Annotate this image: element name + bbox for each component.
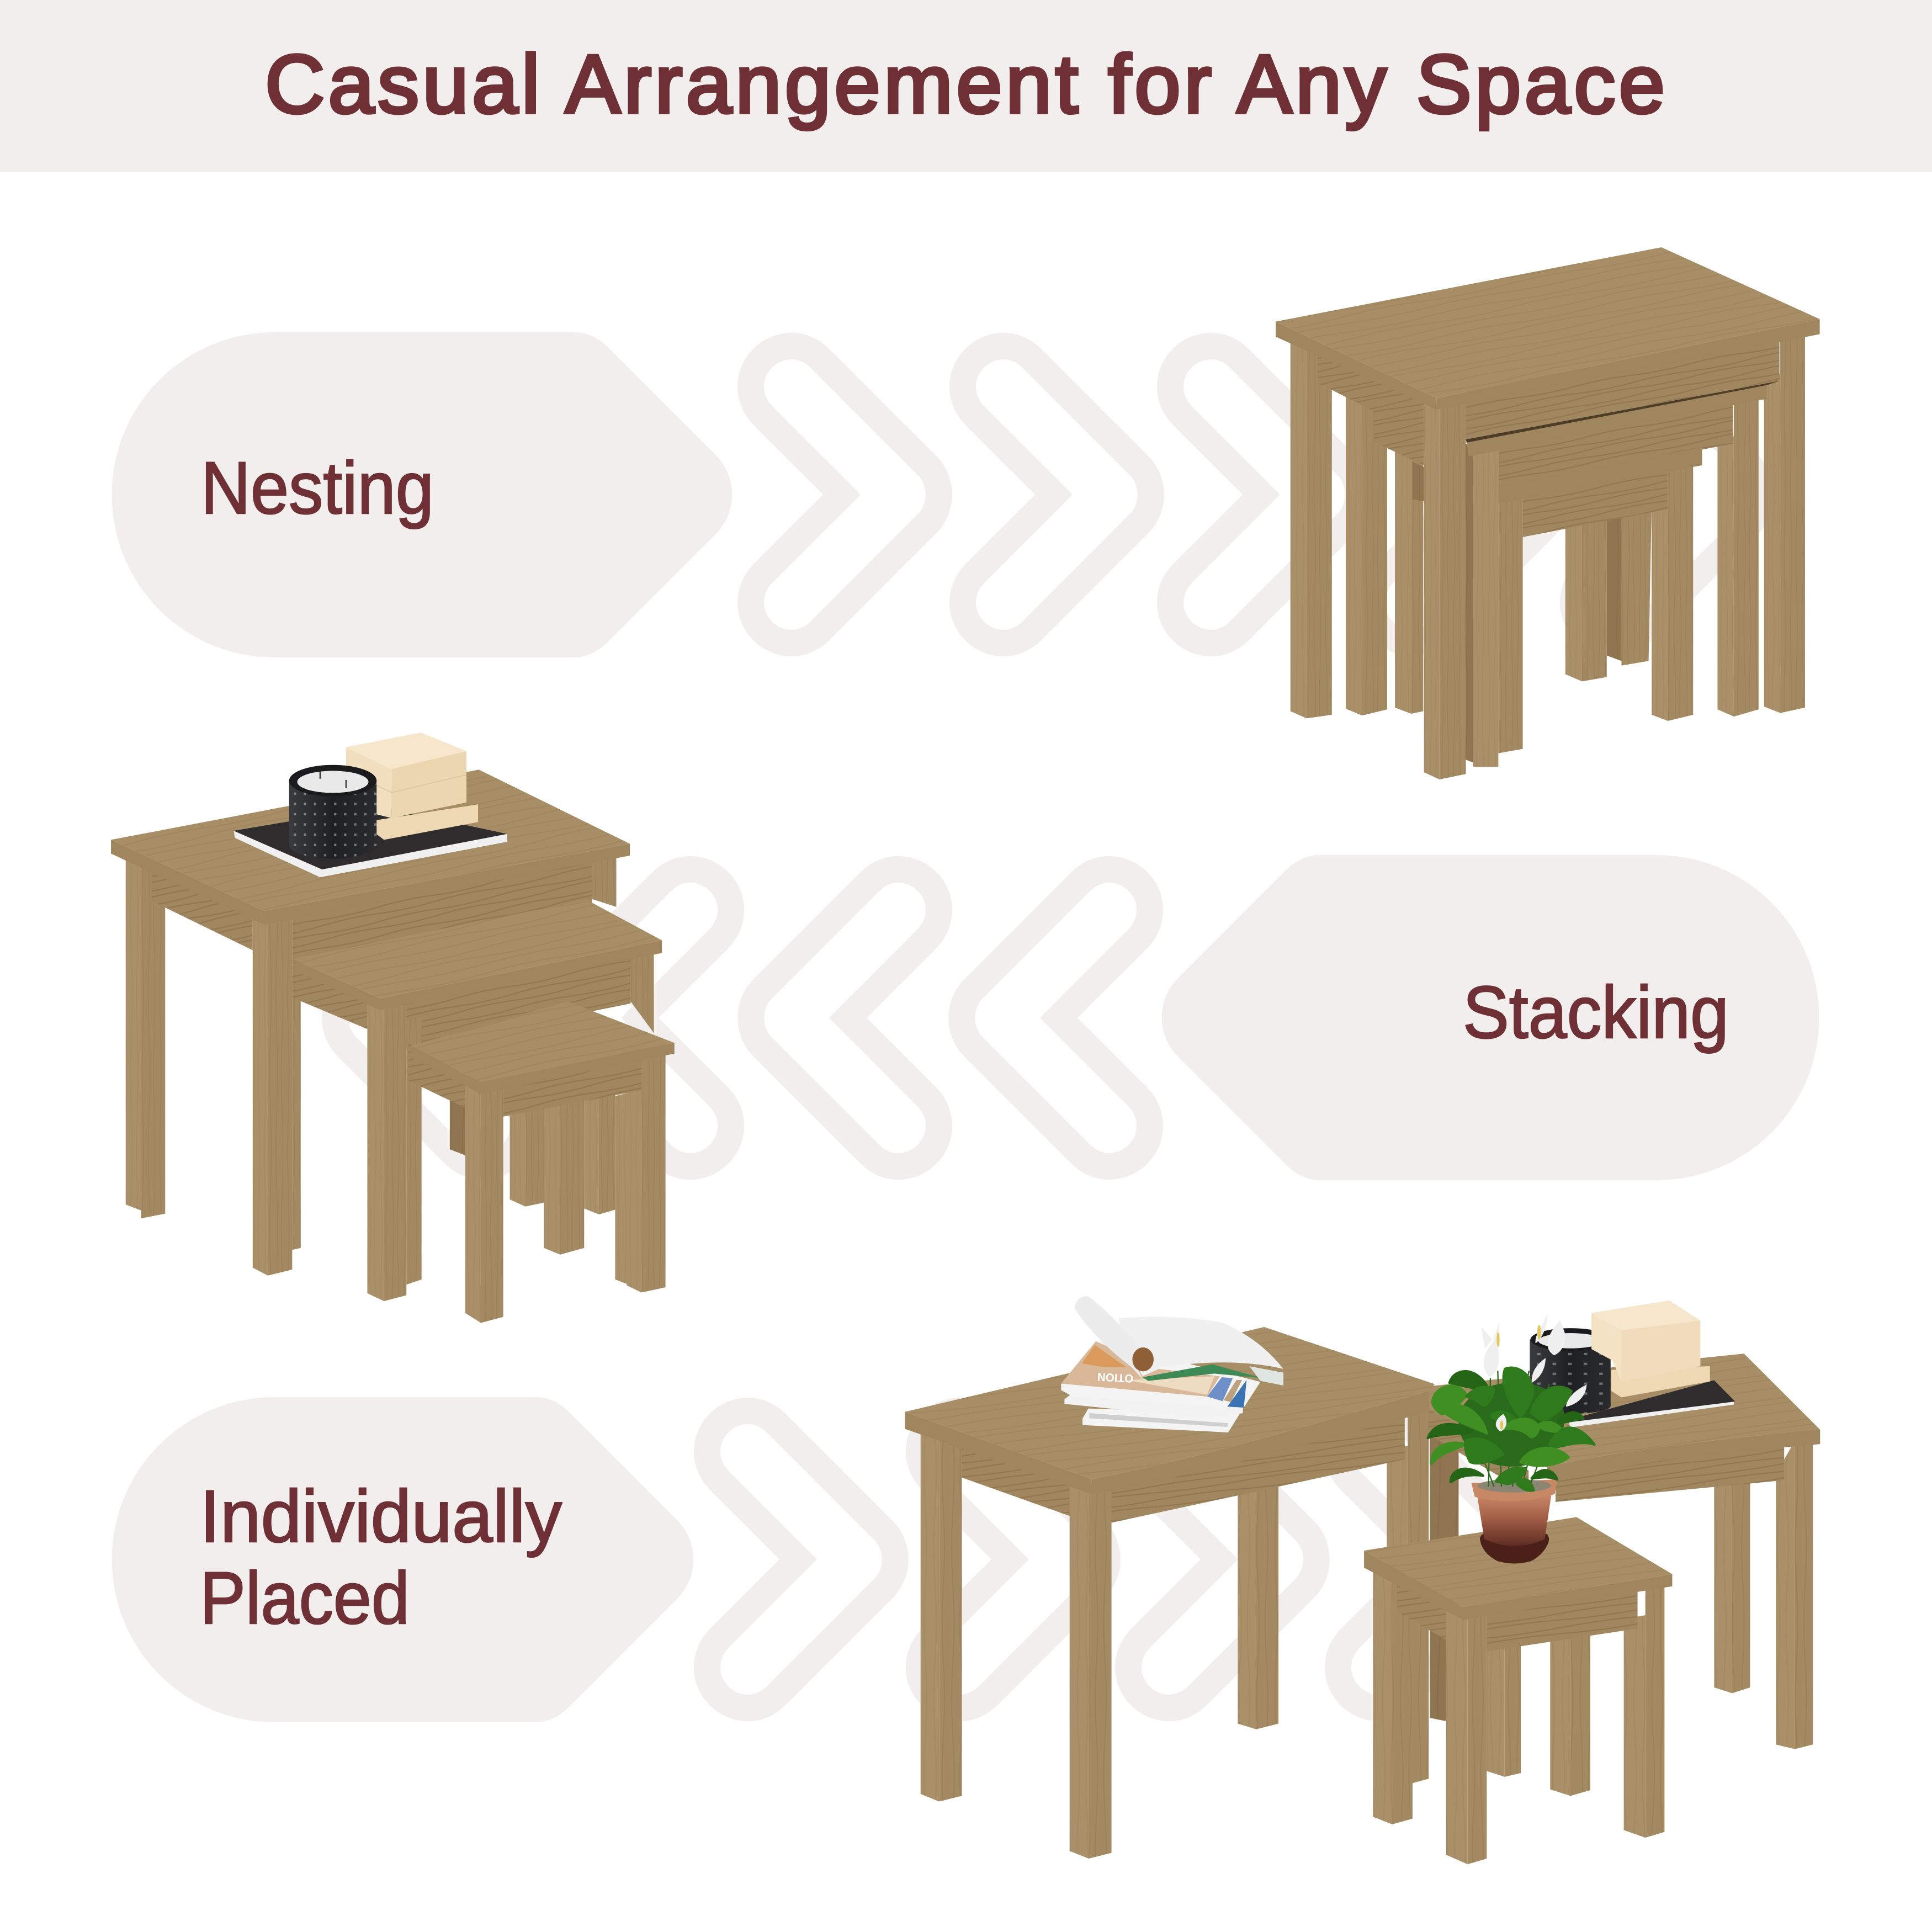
leaf mass behind	[1458, 1382, 1564, 1467]
row 3 arrows: chevrons pointing right	[707, 1411, 1526, 1708]
row 1 arrows: chevrons pointing right	[751, 346, 1761, 643]
pot	[1472, 1479, 1557, 1563]
header band with title: Casual Arrangement for Any Space	[265, 38, 1665, 130]
row 2 arrows: chevrons pointing left	[335, 869, 1150, 1166]
stems	[1481, 1371, 1549, 1487]
image: stacked tables with candle, box and book	[111, 733, 675, 1323]
box	[1591, 1301, 1710, 1397]
pill label: Stacking: Stacking	[1463, 972, 1729, 1054]
candle	[1530, 1328, 1611, 1414]
book	[233, 806, 507, 877]
pill label: Individually Placed: Placed	[200, 1557, 410, 1639]
candle	[289, 765, 376, 859]
box	[346, 733, 478, 840]
pill label: Individually Placed: Individually	[200, 1475, 562, 1558]
pill label: Stacking	[1162, 855, 1819, 1180]
table: large, left	[905, 1327, 1435, 1859]
pill label: Nesting	[112, 332, 732, 657]
pill label: Nesting: Nesting	[201, 447, 434, 529]
table: small stool	[1364, 1517, 1672, 1864]
table: medium, right	[1421, 1301, 1820, 1749]
book	[1568, 1380, 1735, 1427]
white flowers	[1481, 1313, 1586, 1431]
header band with title	[0, 0, 1932, 172]
magazines	[1061, 1296, 1283, 1432]
image: tables placed individually with magazines, candle and plant	[905, 1296, 1820, 1864]
magazines: OTION	[1097, 1370, 1134, 1385]
image: nested tables	[1276, 247, 1820, 779]
pill label: Individually Placed	[112, 1397, 693, 1722]
leaves	[1428, 1368, 1594, 1490]
potted plant	[1428, 1313, 1594, 1563]
